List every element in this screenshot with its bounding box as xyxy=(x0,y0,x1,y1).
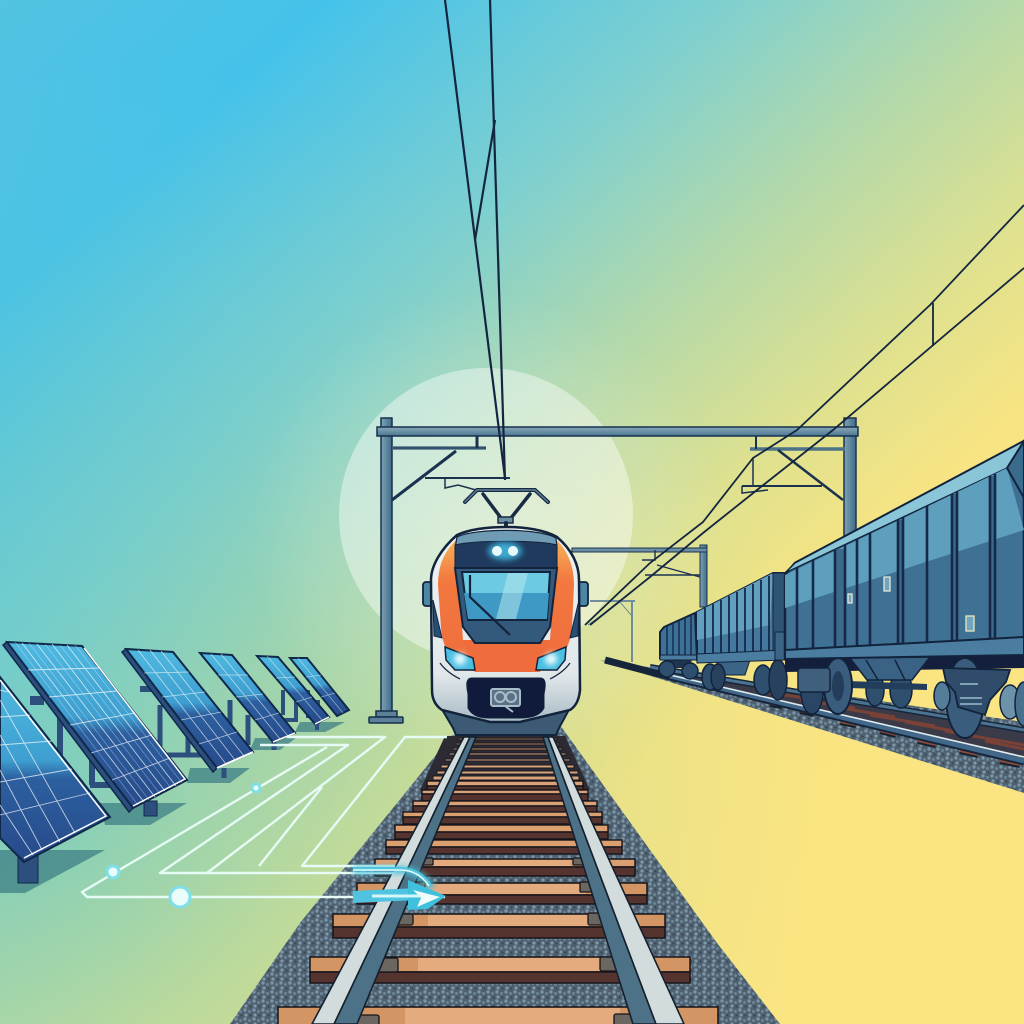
sleeper 5 xyxy=(395,825,608,839)
car end face xyxy=(1007,441,1024,498)
sun halo xyxy=(246,290,726,770)
train undercarriage xyxy=(440,706,571,735)
train top lights xyxy=(488,542,522,560)
train grille xyxy=(467,678,545,718)
train logo plate xyxy=(491,689,520,712)
distant gantry xyxy=(588,600,635,662)
freight track bed between rails xyxy=(650,667,1024,758)
tie ends below near rail xyxy=(770,704,1020,765)
energy nodes xyxy=(107,784,260,907)
car lit upper panels xyxy=(785,468,1024,608)
solar panel 3 xyxy=(122,649,253,778)
gantry top beam xyxy=(377,427,858,436)
solar panel 6 xyxy=(290,658,349,724)
sleeper 3 xyxy=(413,801,597,813)
right gantry column xyxy=(844,418,856,538)
sleeper light centres xyxy=(405,860,620,1024)
middle gantry xyxy=(572,545,707,607)
sleeper 6 xyxy=(386,840,622,854)
sleeper 1 xyxy=(427,781,583,790)
rail right xyxy=(543,737,684,1024)
rail sleepers xyxy=(278,738,718,1024)
gantry brackets right xyxy=(742,436,845,500)
gantry brackets left xyxy=(392,436,510,500)
freight car 1 undercarriage xyxy=(785,653,1024,738)
car rib fills xyxy=(836,476,994,648)
dark bed under dense sleepers xyxy=(420,736,590,790)
rail fasteners xyxy=(355,858,640,1024)
train windshield glass xyxy=(462,572,550,620)
freight track rails xyxy=(605,660,1024,762)
car ribs xyxy=(797,474,995,649)
train mirrors xyxy=(423,582,588,606)
train nose trim lines xyxy=(440,663,570,679)
energy circuit lines xyxy=(82,737,447,897)
sleepers far xyxy=(433,738,579,780)
energy arrow xyxy=(353,869,446,910)
freight car 3 xyxy=(659,613,698,679)
left gantry column and base xyxy=(369,418,403,723)
overhead wires to pantograph xyxy=(445,0,505,480)
train windshield frame xyxy=(455,568,557,643)
train orange livery xyxy=(438,540,574,672)
rail left xyxy=(312,737,476,1024)
sleeper 2 xyxy=(422,790,588,801)
freight car 1 body xyxy=(785,441,1024,659)
train wiper xyxy=(470,575,510,635)
ballast main track xyxy=(230,725,780,1024)
freight track ballast xyxy=(600,660,1024,793)
car roof strip xyxy=(785,441,1024,573)
solar panel 1 xyxy=(0,677,110,883)
ties between rails xyxy=(770,693,1024,749)
train roof cap xyxy=(455,530,557,548)
passenger train xyxy=(423,527,588,735)
freight track ties xyxy=(770,693,1024,765)
sleeper 10 xyxy=(310,957,690,983)
car sill xyxy=(785,637,1024,659)
sleeper 7 xyxy=(375,859,635,876)
solar panel 5 xyxy=(257,656,329,730)
pantograph xyxy=(465,490,548,529)
freight car 2 xyxy=(697,573,787,700)
train headband xyxy=(455,541,557,570)
train body shell xyxy=(431,527,580,722)
sleeper 9 xyxy=(333,914,665,938)
ground shadow under panels xyxy=(0,722,345,893)
solar panel 4 xyxy=(200,653,295,750)
car labels plates xyxy=(848,577,974,631)
sleeper 4 xyxy=(403,812,602,824)
solar panel 2 xyxy=(3,642,187,816)
overhead wires receding right xyxy=(585,205,1024,625)
sleeper 11 xyxy=(278,1007,718,1024)
train side windows xyxy=(433,600,579,638)
train headlights xyxy=(445,647,566,670)
sleeper 8 xyxy=(357,883,647,904)
